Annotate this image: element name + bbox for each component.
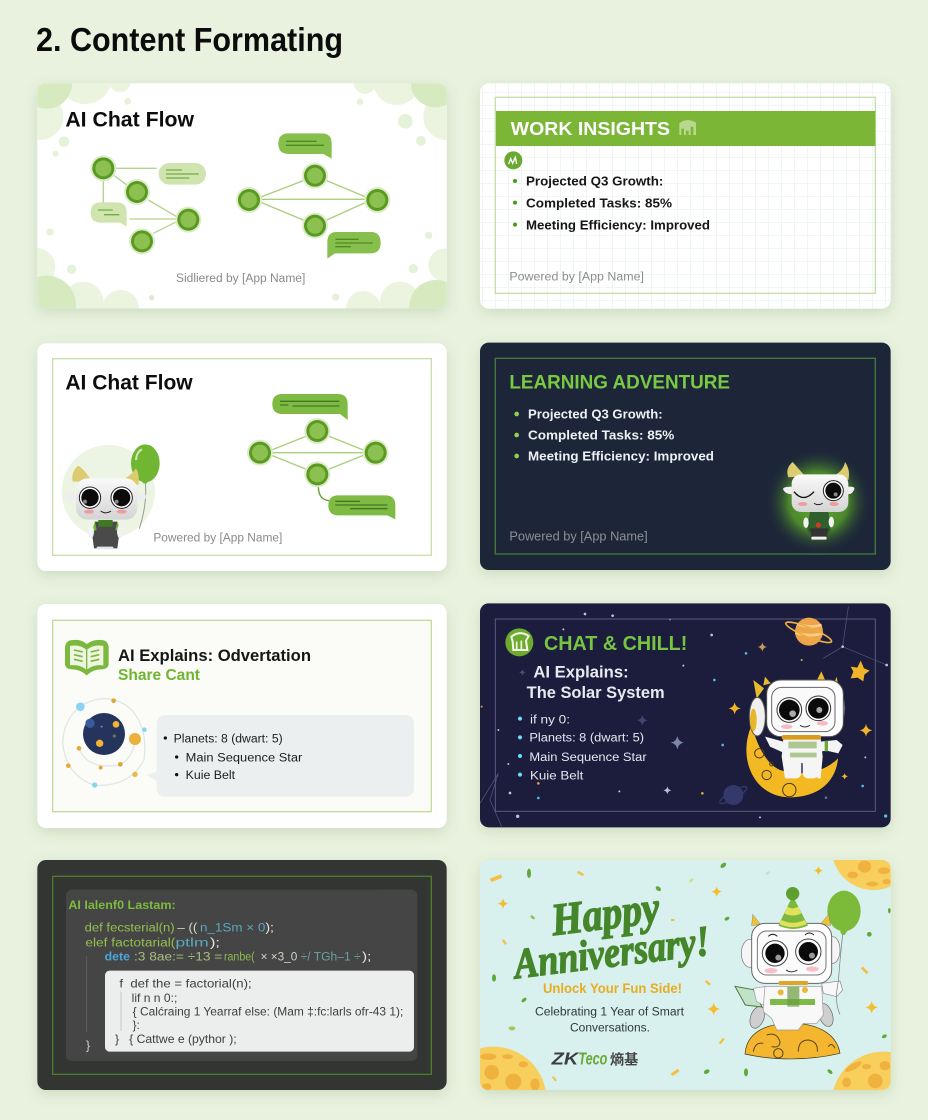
panel: AI Chat Flow with bubbles border xyxy=(34,84,450,316)
code lines on dark: n_1Sm × 0 xyxy=(200,921,265,935)
panel: Chat and Chill space xyxy=(480,603,891,827)
frame xyxy=(53,620,431,812)
indent guide xyxy=(85,956,88,1032)
code panel background xyxy=(66,890,417,1061)
code heading: AI Ialenf0 Lastam: xyxy=(68,898,176,912)
code lines on dark: ranbe( xyxy=(224,949,255,963)
code lines on dark: × ×3_0 xyxy=(261,949,297,963)
frame xyxy=(495,619,875,811)
script heading: Happy Anniversary: Happy xyxy=(548,882,663,945)
heading: CHAT & CHILL! xyxy=(544,633,687,655)
bullet list xyxy=(518,712,647,782)
heading: AI Chat Flow xyxy=(65,107,194,131)
code lines on dark: def fecsterial(n) xyxy=(85,921,175,935)
frame xyxy=(53,876,431,1074)
card background xyxy=(480,603,891,827)
footer credit: Powered by [App Name] xyxy=(509,529,648,543)
grid paper pattern xyxy=(480,83,891,309)
code lines on dark: elef factotarial( xyxy=(85,936,176,950)
card background xyxy=(37,83,447,308)
subheading: The Solar System xyxy=(527,684,665,702)
bullet list: if ny 0: xyxy=(530,712,570,726)
panel: AI Explains light xyxy=(37,604,447,828)
panel: Learning Adventure xyxy=(480,343,891,570)
bullet list: Meeting Efficiency: Improved xyxy=(528,449,714,464)
header band xyxy=(496,111,875,146)
bullet list: Meeting Efficiency: Improved xyxy=(526,218,710,233)
panel: Work Insights xyxy=(480,83,891,309)
solar system illustration xyxy=(63,698,147,788)
logo: ZKTeco: Teco xyxy=(578,1049,607,1069)
gold stars xyxy=(729,642,872,780)
subheading: AI Explains: xyxy=(533,664,629,682)
panel: Happy Anniversary xyxy=(476,860,894,1098)
chat flow network xyxy=(247,394,395,519)
celebration text xyxy=(535,1005,685,1034)
card background xyxy=(480,343,891,570)
heading: LEARNING ADVENTURE xyxy=(509,372,730,393)
callout: facts: Kuie Belt xyxy=(186,768,236,782)
heading: AI Chat Flow xyxy=(65,370,193,394)
callout: facts: Planets: 8 (dwart: 5) xyxy=(174,731,283,745)
bullet list: Projected Q3 Growth: xyxy=(528,407,663,422)
frame xyxy=(53,359,431,555)
footer credit: Powered by [App Name] xyxy=(153,530,282,544)
panel: Code explanation xyxy=(37,860,447,1090)
card background xyxy=(37,604,447,828)
logo: ZKTeco: 熵基 xyxy=(610,1050,638,1070)
code box xyxy=(105,971,414,1052)
corner cheese moons xyxy=(480,860,891,1090)
heading: WORK INSIGHTS xyxy=(511,118,670,139)
code lines on dark: ÷/ TGh–1 ÷ xyxy=(301,949,361,963)
code box: { Calćraing 1 Yearraf else: (Mam ‡:fc:larls ofr-43 1); xyxy=(133,1006,403,1019)
icon: green badge xyxy=(505,628,533,656)
code box: f def the = factorial(n); xyxy=(119,977,252,990)
script heading: Happy Anniversary: Anniversary! xyxy=(509,918,712,989)
astronaut mascot with party hat and balloon xyxy=(735,887,861,1059)
subheading: Share Cant xyxy=(118,667,201,684)
script heading: Happy Anniversary xyxy=(509,882,712,989)
celebration text: Conversations. xyxy=(570,1020,650,1034)
subheading xyxy=(527,664,665,702)
card background xyxy=(37,860,447,1090)
code lines on dark: – (( xyxy=(177,921,198,935)
confetti xyxy=(490,862,891,1081)
code lines on dark: ); xyxy=(210,936,220,950)
bullet list: Kuie Belt xyxy=(530,768,584,782)
footer credit: Powered by [App Name] xyxy=(509,269,644,283)
icon: ringed planet xyxy=(784,618,833,646)
code lines on dark: ); xyxy=(362,949,371,963)
bullet list xyxy=(514,407,714,464)
code lines on dark: ); xyxy=(265,921,274,935)
bullet list: Projected Q3 Growth: xyxy=(526,174,663,189)
callout: facts: Main Sequence Star xyxy=(186,750,302,764)
bullet list: Main Sequence Star xyxy=(529,750,647,764)
title: 2. Content Formating xyxy=(36,21,343,58)
code lines on dark: :3 8ae:= ÷13 = xyxy=(134,949,222,963)
mascot winking with glow xyxy=(765,448,872,555)
logo: ZKTeco: ZK xyxy=(551,1049,581,1069)
bullet list: Planets: 8 (dwart: 5) xyxy=(529,731,644,745)
footer credit: Sidliered by [App Name] xyxy=(176,271,305,285)
code lines on dark: ptlm xyxy=(175,936,209,950)
starfield and constellations xyxy=(480,607,888,827)
code lines on dark xyxy=(85,921,371,1053)
right chat flow network xyxy=(236,133,390,259)
code lines on dark: } xyxy=(86,1039,90,1053)
icon: chart badge xyxy=(504,151,522,169)
code box: }: xyxy=(133,1019,140,1032)
frame xyxy=(495,97,875,293)
decorative corner bubbles xyxy=(37,83,447,308)
celebration text: Celebrating 1 Year of Smart xyxy=(535,1005,685,1019)
panel: AI Chat Flow with mascot xyxy=(37,343,447,571)
bullet list: Completed Tasks: 85% xyxy=(526,196,672,211)
bullet list xyxy=(513,174,710,233)
code box: } { Cattwe e (pythor ); xyxy=(115,1033,237,1046)
logo: ZKTeco xyxy=(551,1049,638,1070)
card background xyxy=(480,83,891,309)
code lines on dark: dete xyxy=(105,949,130,963)
card background xyxy=(37,343,447,571)
mascot with balloon xyxy=(62,444,160,549)
tagline: Unlock Your Fun Side! xyxy=(543,981,682,996)
callout: facts xyxy=(147,715,414,797)
left chat flow network xyxy=(90,155,206,254)
card background xyxy=(480,860,891,1090)
code box: lif n n 0:; xyxy=(132,992,177,1005)
bullet list: Completed Tasks: 85% xyxy=(528,428,675,443)
icon: open book xyxy=(65,640,109,675)
frame xyxy=(495,358,875,554)
astronaut mascot on crescent moon xyxy=(746,671,845,797)
icon: chart in header xyxy=(679,120,696,135)
heading: AI Explains: Odvertation xyxy=(118,646,311,665)
